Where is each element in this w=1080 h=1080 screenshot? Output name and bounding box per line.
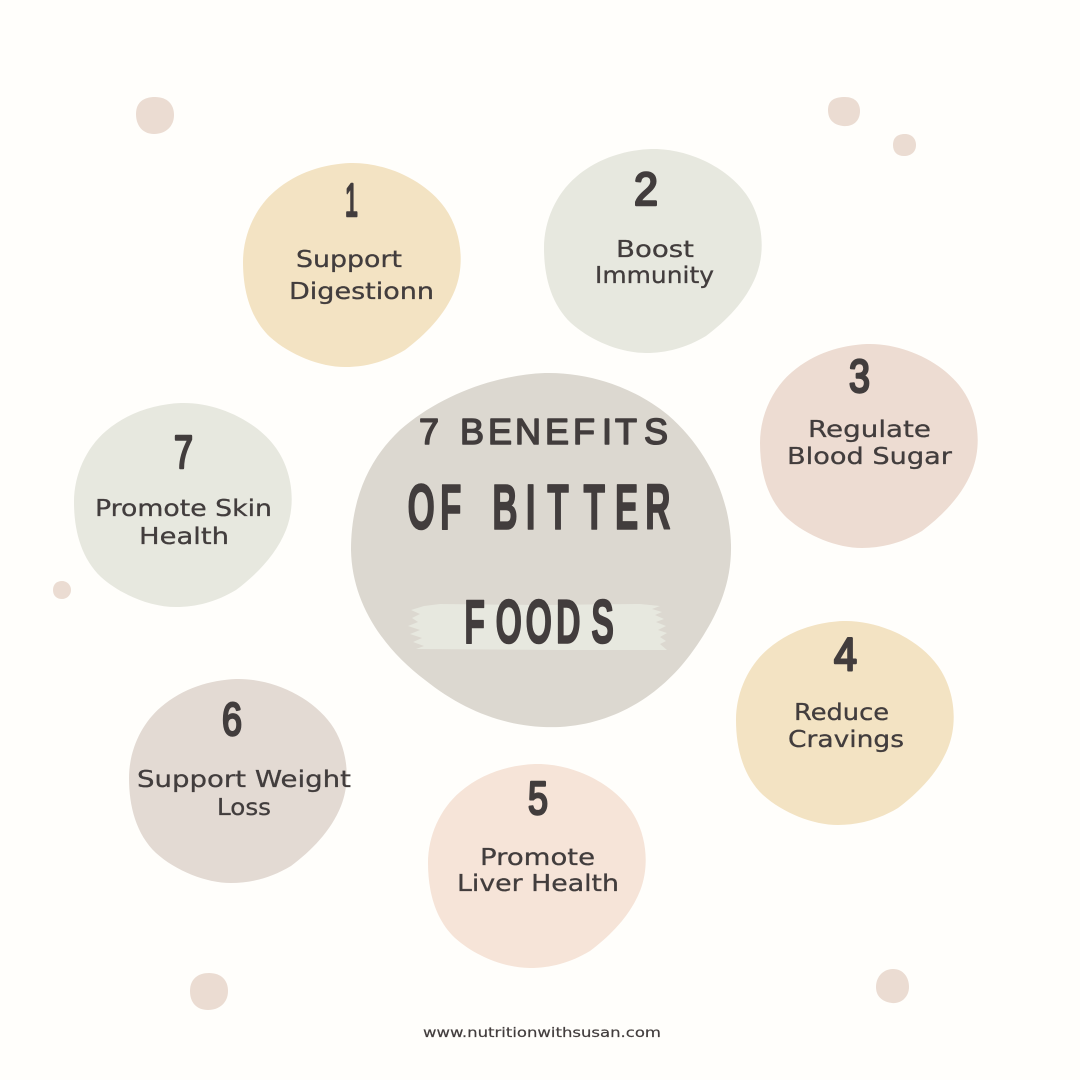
label: Reduce bbox=[794, 700, 889, 726]
decorative dot: top right small bbox=[893, 134, 916, 156]
panel: benefit 1: Digestionn bbox=[289, 279, 434, 305]
number 4: 4 bbox=[834, 628, 857, 680]
number 1: 1 bbox=[345, 174, 358, 226]
number 7: 7 bbox=[174, 426, 193, 478]
panel: benefit 5: Liver Health bbox=[457, 871, 619, 897]
decorative dot: top right large bbox=[828, 97, 860, 126]
number 2: 2 bbox=[634, 163, 658, 215]
label: Support bbox=[296, 247, 402, 273]
panel: benefit 7 bbox=[74, 403, 292, 607]
panel: benefit 3 bbox=[760, 344, 978, 548]
panel: benefit 5 bbox=[428, 764, 646, 968]
label: Promote bbox=[480, 845, 595, 871]
brush stroke highlight bbox=[408, 604, 667, 650]
number 5: 5 bbox=[528, 772, 548, 824]
decorative dot: bottom left bbox=[190, 973, 228, 1010]
decorative dot: top left bbox=[136, 97, 174, 134]
label: Support Weight bbox=[137, 767, 351, 793]
central panel: title bbox=[351, 373, 731, 727]
number 6: 6 bbox=[222, 693, 242, 745]
heading line: of bitter: OFBITTER bbox=[408, 471, 671, 543]
panel: benefit 1 bbox=[243, 163, 461, 367]
label: Promote Skin bbox=[95, 496, 272, 522]
panel: benefit 6: Loss bbox=[217, 795, 271, 821]
panel: benefit 4 bbox=[736, 621, 954, 825]
label: Boost bbox=[616, 237, 694, 263]
label: Regulate bbox=[808, 417, 931, 443]
panel: benefit 2 bbox=[544, 149, 762, 353]
panel: benefit 2: Immunity bbox=[595, 263, 714, 289]
heading line: 7 benefits: 7BENEFITS bbox=[419, 411, 668, 452]
panel: benefit 3: Blood Sugar bbox=[787, 444, 953, 470]
panel: benefit 6 bbox=[129, 679, 351, 883]
footer website: www.nutritionwithsusan.com bbox=[423, 1025, 661, 1041]
decorative dot: left bbox=[53, 581, 71, 599]
panel: benefit 4: Cravings bbox=[788, 727, 904, 753]
panel: benefit 7: Health bbox=[139, 524, 229, 550]
decorative dot: bottom right bbox=[876, 969, 909, 1003]
number 3: 3 bbox=[849, 350, 870, 402]
heading line: foods: FOODS bbox=[464, 587, 614, 657]
